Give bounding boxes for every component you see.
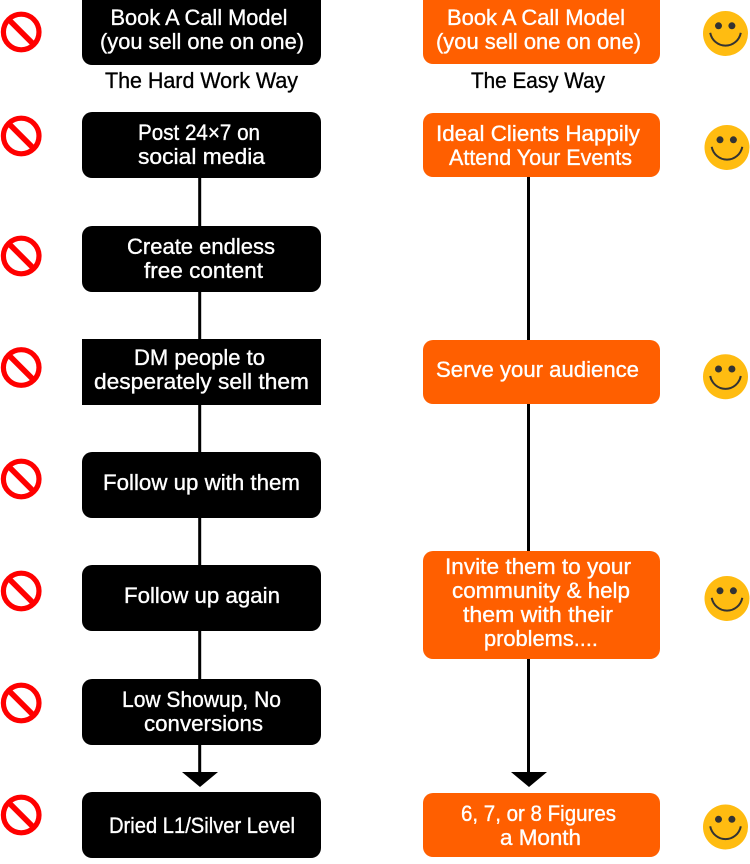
heading: the hard work way: The Hard Work Way [105,68,298,93]
box: low showup: conversions [144,711,263,736]
box: post on social media [82,112,321,178]
box: post on social media: Post 24×7 on [138,120,260,145]
icons: smileys [703,11,750,850]
box: figures a month [423,793,660,857]
box: dried level [82,792,321,858]
icon: smiley 4 [704,576,750,621]
box: low showup: Low Showup, No [122,687,281,712]
box: invite to community: Invite them to your [445,554,631,579]
box: figures a month: a Month [500,825,581,850]
icon: prohibition 6 [3,573,39,609]
box: dm people: DM people to [134,345,265,370]
icon: smiley 2 [704,125,750,170]
box: create endless free content [82,226,321,292]
box: post on social media: social media [138,144,266,169]
box: invite to community: them with their [463,602,613,627]
icon: prohibition 2 [3,118,39,154]
box: book a call model: (you sell one on one) [436,29,641,54]
panel: easy way column [423,0,660,857]
box: book a call model [82,0,321,65]
icon: prohibition 5 [3,461,39,497]
box: create endless free content: Create endless [127,234,275,259]
box: book a call model: (you sell one on one) [100,29,304,54]
box: figures a month: 6, 7, or 8 Figures [461,801,616,826]
box: dried level: Dried L1/Silver Level [109,813,295,838]
icon: prohibition 7 [3,685,39,721]
icons: prohibition signs [3,14,39,833]
box: follow up with them: Follow up with them [103,470,300,495]
connector line: easy way [527,177,530,774]
box: follow up again [82,565,321,631]
box: book a call model: Book A Call Model [110,5,288,30]
box: ideal clients: Ideal Clients Happily [436,121,640,146]
box: serve your audience [423,340,660,404]
icon: smiley 1 [703,11,748,56]
box: serve your audience: Serve your audience [436,357,639,382]
box: invite to community: problems.... [484,626,598,651]
arrow: hard work way [182,772,218,787]
icon: prohibition 1 [3,14,39,50]
panel: hard work way column [82,0,321,858]
icon: prohibition 4 [3,350,39,385]
heading: the easy way: The Easy Way [471,68,605,93]
icon: prohibition 3 [3,238,39,274]
box: book a call model: Book A Call Model [447,5,625,30]
box: dm people [82,339,321,405]
box: create endless free content: free content [144,258,263,283]
icon: smiley 5 [703,804,748,850]
icon: smiley 3 [703,354,748,399]
box: invite to community: community & help [452,578,630,603]
box: book a call model [423,0,660,64]
box: dm people: desperately sell them [94,369,309,394]
connector line: hard work way [198,178,201,774]
box: low showup [82,679,321,745]
arrow: easy way [511,772,547,787]
box: follow up with them [82,452,321,518]
box: invite to community [423,551,660,659]
box: ideal clients: Attend Your Events [449,145,632,170]
icon: prohibition 8 [3,797,39,833]
box: ideal clients [423,113,660,177]
box: follow up again: Follow up again [124,583,280,608]
